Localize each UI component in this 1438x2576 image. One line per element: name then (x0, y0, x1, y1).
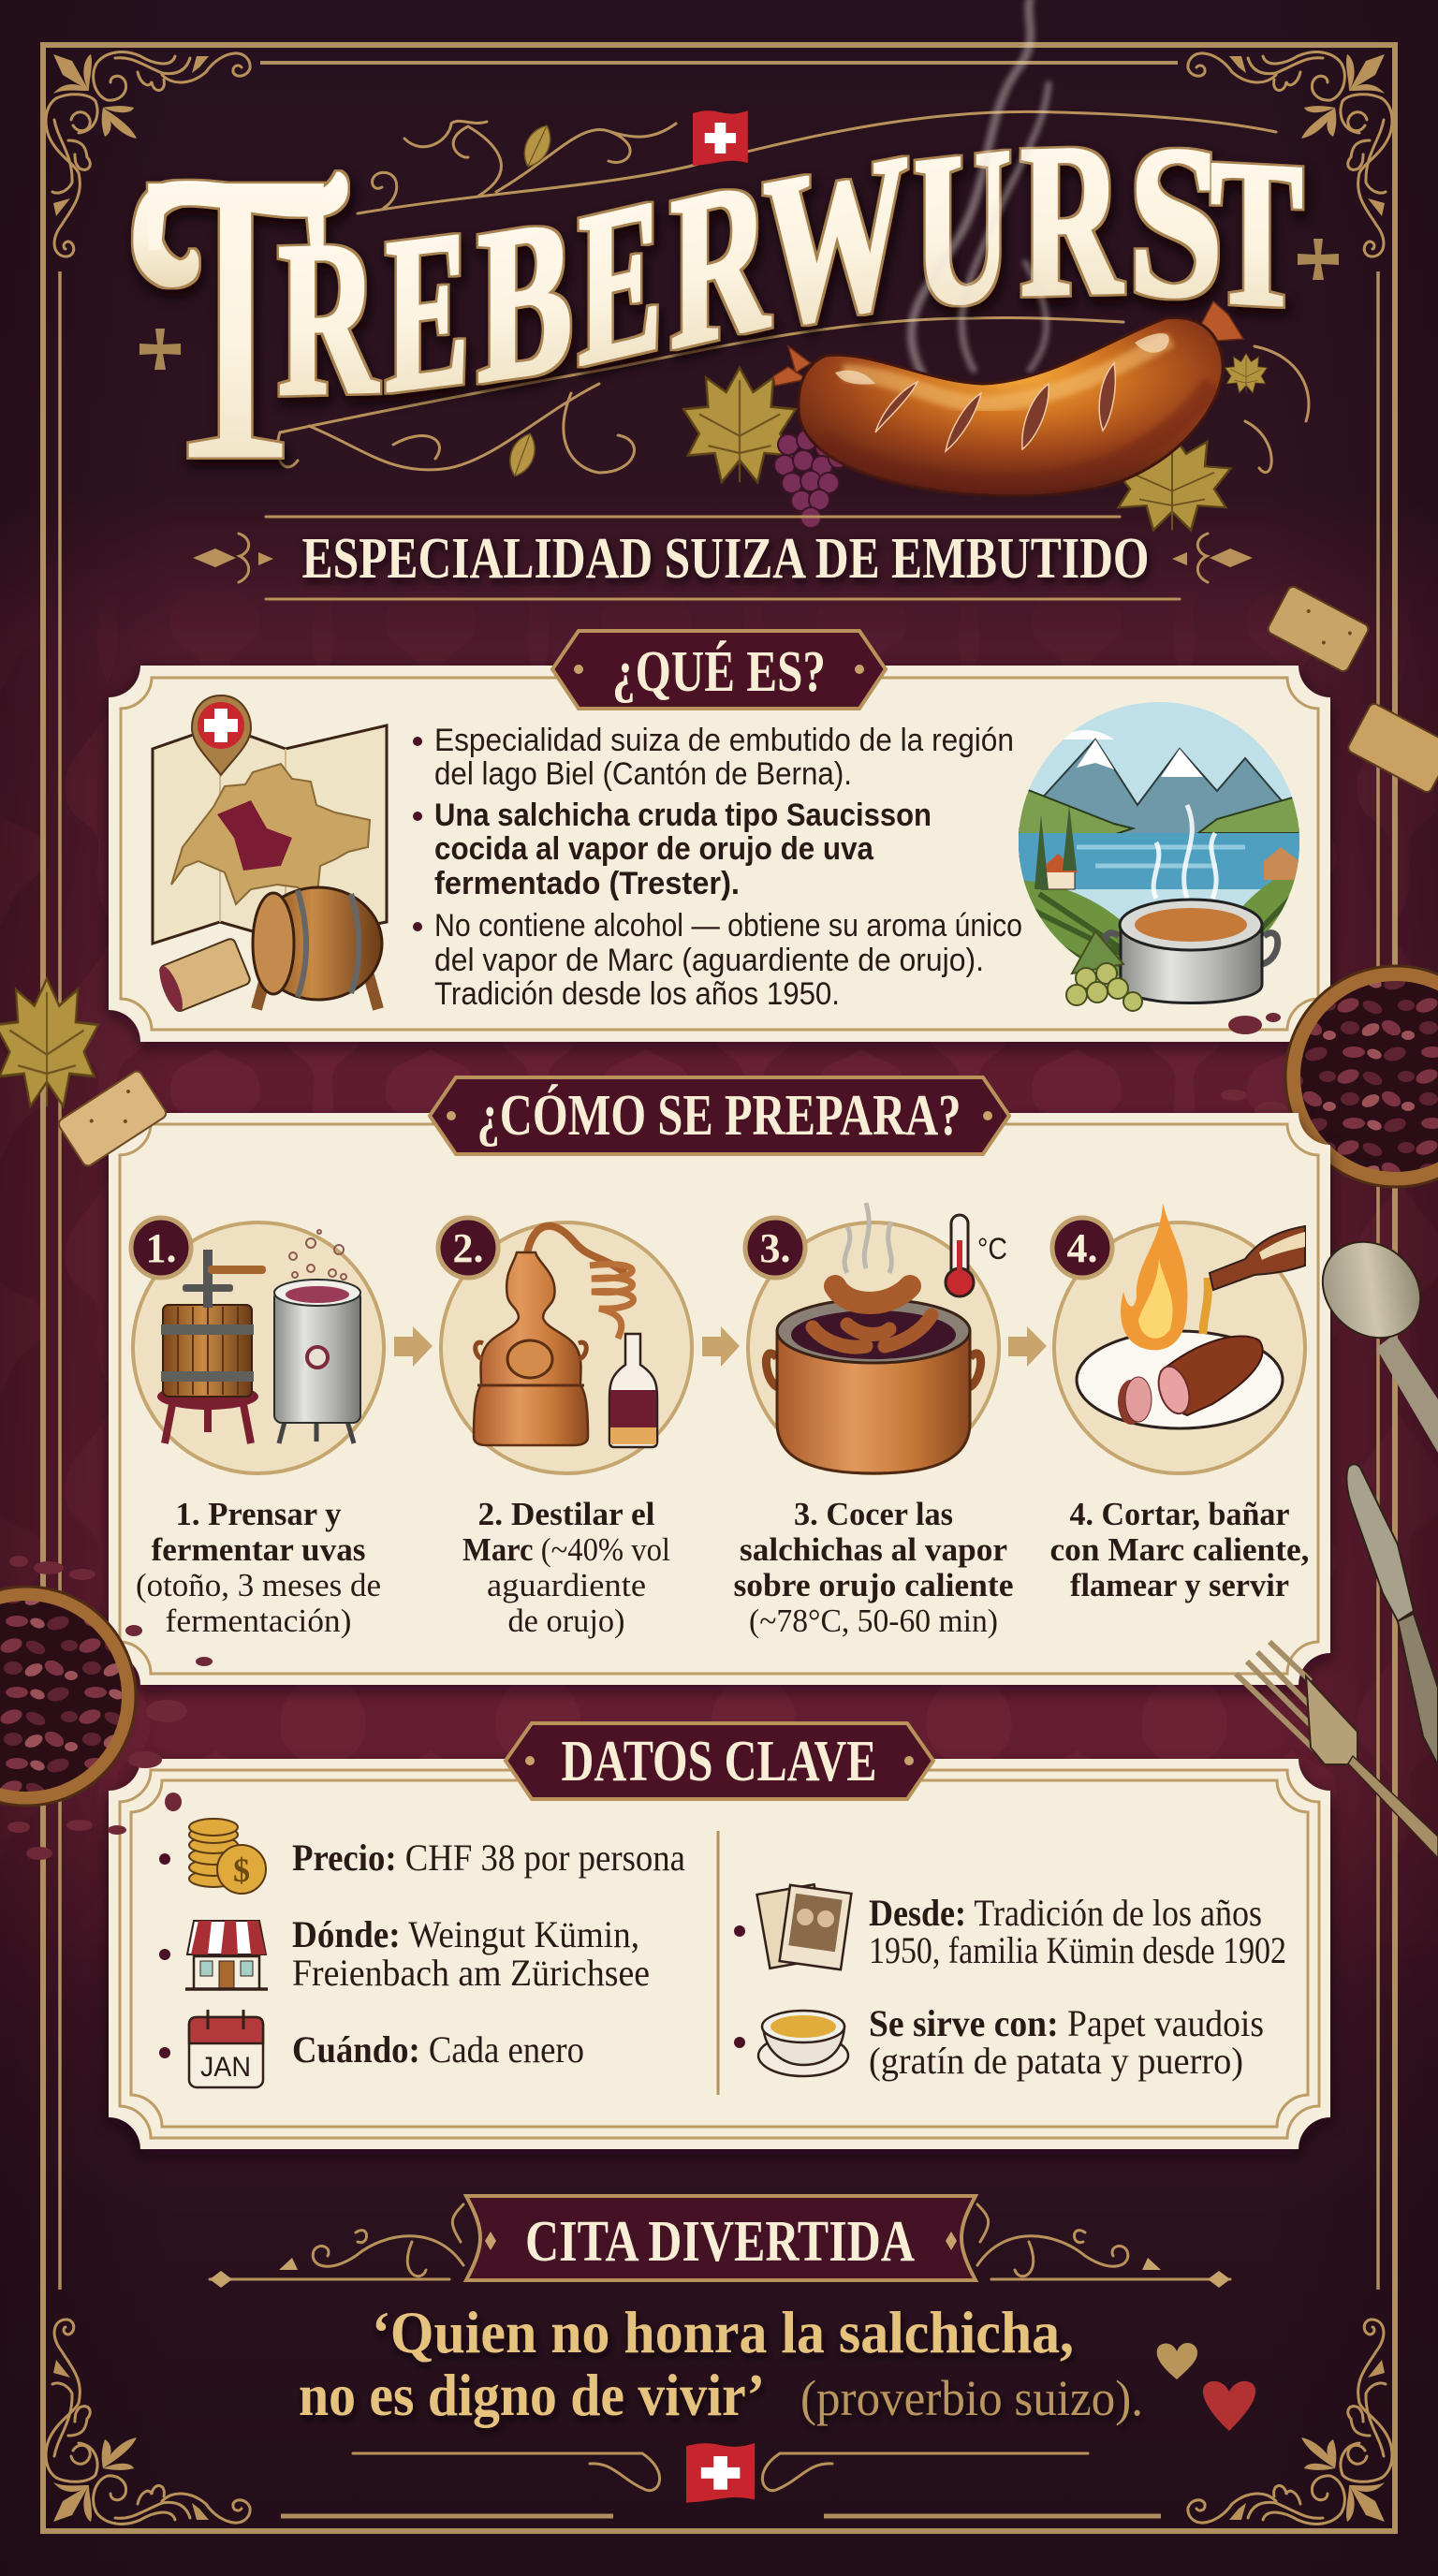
bowl of pomace right (1285, 966, 1438, 1187)
quote (299, 2299, 1143, 2428)
step 1 illustration: grape press and tank (157, 1230, 360, 1443)
step 3 thermometer (946, 1215, 1007, 1296)
grape cluster (774, 430, 847, 528)
title: B (477, 170, 572, 431)
step 4 caption: 4. Cortar, bañar (1069, 1496, 1290, 1532)
row: donde: Dónde: Weingut Kümin, (292, 1913, 639, 1955)
panel: datos clave (109, 1723, 1330, 2149)
cross right (1298, 239, 1339, 280)
bullet list: del vapor de Marc (aguardiente de orujo). (434, 943, 984, 978)
panel heading banner (506, 1723, 933, 1799)
panel heading banner: ¿QUÉ ES? (612, 640, 826, 704)
illustration: steaming pot (1105, 805, 1278, 1003)
bullet list: Tradición desde los años 1950. (434, 976, 840, 1012)
step 2 caption: de orujo) (507, 1603, 625, 1639)
step 4 (1050, 1203, 1309, 1603)
quote heading banner: CITA DIVERTIDA (525, 2210, 915, 2274)
leaf left decoration (0, 979, 98, 1106)
step 2 number (438, 1218, 498, 1278)
pomace crumbs right (1211, 1013, 1319, 1189)
icon: cork (155, 937, 252, 1014)
subtitle ornaments (193, 534, 1253, 582)
row: desde: Desde: Tradición de los años (869, 1892, 1262, 1934)
cork 1 (1266, 585, 1371, 673)
title: W (763, 107, 908, 374)
bullet list: del lago Biel (Cantón de Berna). (434, 756, 852, 792)
bullet list (413, 723, 1022, 1012)
arrow 2 (702, 1326, 740, 1367)
step 1 caption: 1. Prensar y (176, 1496, 342, 1532)
title: R (670, 128, 770, 396)
top Swiss flag (693, 110, 748, 166)
ornament: upper small leaf (518, 121, 557, 171)
step 3 number (745, 1218, 805, 1278)
fork (1236, 1642, 1438, 1858)
step 4 caption: flamear y servir (1070, 1567, 1289, 1603)
bullet list: No contiene alcohol — obtiene su aroma único (434, 908, 1022, 944)
step 3 caption (734, 1496, 1013, 1639)
bullet list: Especialidad suiza de embutido de la región (434, 723, 1014, 758)
panel heading banner: ¿CÓMO SE PREPARA? (477, 1084, 961, 1148)
icon: coins: $ (233, 1852, 250, 1889)
subtitle: ESPECIALIDAD SUIZA DE EMBUTIDO (301, 527, 1150, 591)
panel: que es (109, 631, 1330, 1042)
step 2 caption: Marc (~40% vol (462, 1531, 670, 1568)
illustration: white grapes (1066, 931, 1142, 1011)
title swashes and vines (139, 111, 1339, 480)
vine leaves behind sausage (683, 354, 1268, 530)
step 3 caption: 3. Cocer las (794, 1496, 953, 1532)
cork 2 (1346, 702, 1438, 794)
step 3 number: 3. (760, 1225, 790, 1271)
bullet list: Una salchicha cruda tipo Saucisson (434, 798, 932, 833)
step 3 caption: (~78°C, 50-60 min) (749, 1603, 998, 1639)
row: donde (292, 1913, 650, 1994)
title: U (914, 101, 1011, 356)
step 2 illustration: copper still (474, 1226, 657, 1447)
row: se sirve con (869, 2002, 1264, 2082)
step 1 (131, 1218, 384, 1639)
title: S (1128, 101, 1224, 343)
step 2 number: 2. (453, 1225, 483, 1271)
step 2 (438, 1218, 692, 1639)
row: desde (869, 1892, 1286, 1971)
subtitle rules (266, 517, 1180, 599)
icon: coins (189, 1819, 266, 1894)
arrow 1 (394, 1326, 433, 1367)
icon: barrel (253, 887, 382, 1009)
illustration: lake and vineyards (1019, 702, 1301, 983)
step 3 illustration: pot with sausages (766, 1203, 981, 1473)
sausage body (799, 317, 1223, 496)
step 2 caption: aguardiente (487, 1567, 646, 1603)
steam (912, 0, 1049, 374)
pomace crumbs left (7, 1556, 213, 1860)
row: desde: 1950, familia Kümin desde 1902 (869, 1929, 1286, 1971)
bowl of pomace left (0, 1587, 136, 1806)
sausage knots (773, 301, 1243, 386)
bullet list: cocida al vapor de orujo de uva (434, 831, 874, 867)
icon: calendar: JAN (200, 2052, 251, 2083)
title: R (278, 193, 379, 443)
title: R (1020, 95, 1123, 343)
sausage (773, 301, 1243, 496)
row: se sirve con: Se sirve con: Papet vaudois (869, 2002, 1264, 2044)
corks top right (1266, 585, 1438, 794)
row: donde: Freienbach am Zürichsee (292, 1952, 650, 1994)
step 3 thermometer: °C (977, 1232, 1007, 1266)
bullet list: fermentado (Trester). (434, 866, 740, 901)
quote: no es digno de vivir’ (299, 2362, 765, 2428)
ornament: lower small leaf (505, 430, 540, 480)
row: precio: Precio: CHF 38 por persona (292, 1837, 685, 1879)
quote: ‘Quien no honra la salchicha, (372, 2299, 1074, 2365)
step 1 caption (136, 1496, 381, 1639)
title: E (579, 150, 662, 413)
step 3 caption: sobre orujo caliente (734, 1567, 1013, 1603)
step 1 caption: (otoño, 3 meses de (136, 1567, 381, 1603)
panel: como se prepara (109, 1077, 1330, 1685)
icon: gratin bowl (758, 2011, 848, 2076)
background (0, 430, 1438, 2181)
icon: photos (757, 1884, 851, 1969)
cross left (139, 329, 181, 370)
icon: shop (185, 1921, 268, 1989)
step 1 caption: fermentar uvas (152, 1531, 365, 1568)
knife (1346, 1464, 1438, 1765)
icon: calendar (189, 2010, 263, 2087)
step 3 (734, 1203, 1013, 1639)
panel heading banner (552, 631, 886, 709)
step 1 number: 1. (146, 1225, 176, 1271)
arrow 3 (1008, 1326, 1047, 1367)
step 1 number (131, 1218, 191, 1278)
step 4 caption (1050, 1496, 1309, 1603)
step 4 caption: con Marc caliente, (1050, 1531, 1309, 1568)
row: se sirve con: (gratín de patata y puerro) (869, 2040, 1243, 2082)
title: E (386, 182, 469, 440)
column divider (717, 1831, 719, 2095)
title (135, 88, 1303, 546)
quote heading banner (210, 2196, 1230, 2288)
bullets (159, 1853, 745, 2058)
red heart (1203, 2381, 1255, 2431)
icon: map pin (192, 695, 251, 775)
spoon (1303, 1222, 1438, 1453)
step 4 number: 4. (1067, 1225, 1097, 1271)
title: T (1211, 116, 1303, 353)
step 2 caption: 2. Destilar el (477, 1496, 655, 1532)
row: cuando: Cuándo: Cada enero (292, 2028, 584, 2071)
panel heading banner: DATOS CLAVE (562, 1730, 876, 1793)
panel heading banner (430, 1077, 1009, 1154)
gold heart (1157, 2343, 1197, 2379)
bottom flag ornament (353, 2443, 1088, 2503)
step 2 caption (462, 1496, 670, 1639)
quote: (proverbio suizo). (800, 2370, 1143, 2426)
step 1 caption: fermentación) (165, 1603, 352, 1639)
step 4 number (1052, 1218, 1112, 1278)
icon: Swiss map (153, 725, 387, 944)
step 4 illustration: flame, plate, sausage, bottle (1077, 1203, 1305, 1428)
cork left (57, 1069, 168, 1168)
step 3 caption: salchichas al vapor (740, 1531, 1007, 1568)
title: T (144, 88, 327, 546)
